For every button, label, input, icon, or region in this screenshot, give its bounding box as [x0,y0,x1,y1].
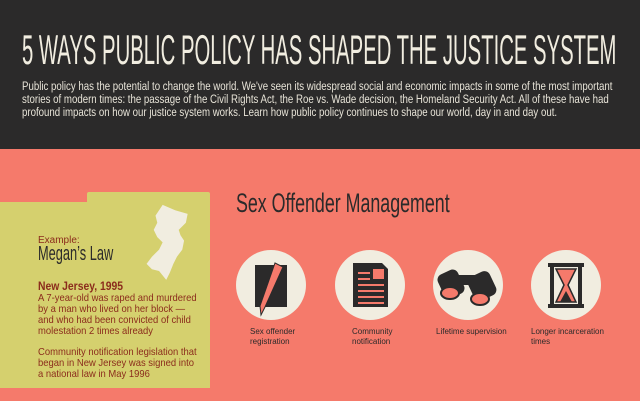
label: incarceration [531,327,604,346]
icon: binoculars [433,250,503,320]
panel: Megan's Law example [0,192,210,388]
label: registration: Sex offender [250,327,295,336]
text: New Jersey 1995 [38,281,197,337]
intro text [22,79,612,119]
text: New Jersey 1995: molestation 2 times already [38,325,153,337]
icon: hourglass [531,250,601,320]
label: registration: registration [250,337,290,346]
icon: notification [335,250,405,320]
label: incarceration: times [531,337,550,346]
icon: registration [236,250,306,320]
label: incarceration: Longer incarceration [531,327,604,336]
text: New Jersey 1995: and who had been convicted of child [38,314,191,326]
label: supervision: Lifetime supervision [436,327,507,336]
text: legislation [38,346,197,380]
icon: New Jersey map [146,204,188,280]
text: legislation: a national law in May 1996 [38,368,150,380]
text: New Jersey 1995: A 7-year-old was raped and murdered [38,292,197,304]
label: notification: Community [352,327,392,336]
label: Example: Example: [38,235,80,246]
text: legislation: began in New Jersey was signed into [38,357,194,369]
label: notification [352,327,392,346]
heading: Sex Offender Management: Sex Offender Management [236,188,450,218]
label: registration [250,327,296,346]
text: legislation: Community notification legislation that [38,346,197,358]
header panel [0,0,640,149]
intro text: profound impacts on how our justice system works. Learn how public policy continues to shape our world, day in and day out. [22,105,557,119]
text: New Jersey 1995: by a man who lived on her block — [38,303,185,315]
intro text: stories of modern times: the passage of the Civil Rights Act, the Roe vs. Wade decision, the Homeland Security Act. All of these have had [22,92,609,106]
heading: Megan's Law: Megan’s Law [38,243,113,265]
intro text: Public policy has the potential to change the world. We've seen its widespread social and economic impacts in some of the most important [22,79,612,93]
label: notification: notification [352,337,390,346]
title: 5 WAYS PUBLIC POLICY HAS SHAPED THE JUSTICE SYSTEM [22,26,616,73]
text: New Jersey 1995: New Jersey, 1995 [38,281,123,293]
